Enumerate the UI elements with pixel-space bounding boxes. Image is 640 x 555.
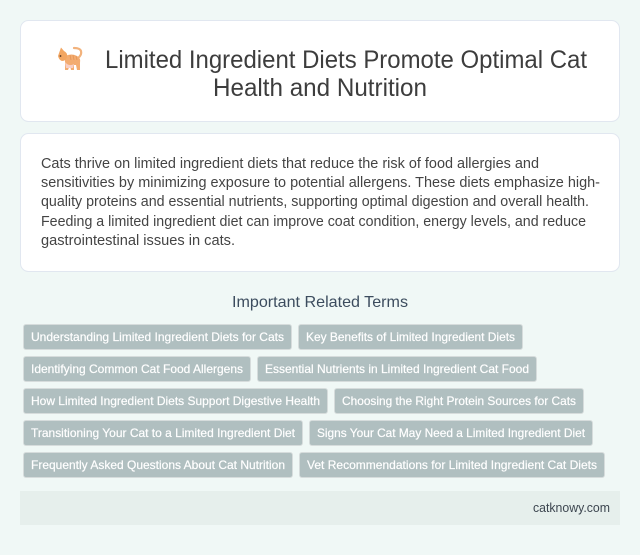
- title text: Health and Nutrition: [213, 74, 427, 102]
- panel: description: [20, 134, 620, 272]
- tag: protein sources: [334, 388, 584, 414]
- description text: sensitivities by minimizing exposure to potential allergens. These diets emphasize high-: [41, 175, 600, 191]
- tag: digestive health: How Limited Ingredient Diets Support Digestive Health: [31, 394, 320, 408]
- tag: signs: Signs Your Cat May Need a Limited Ingredient Diet: [317, 426, 586, 440]
- tag: protein sources: Choosing the Right Protein Sources for Cats: [342, 394, 576, 408]
- tag: digestive health: [24, 388, 328, 414]
- tag: essential nutrients: [258, 356, 536, 382]
- tag: understanding: Understanding Limited Ingredient Diets for Cats: [31, 330, 284, 344]
- tag: understanding: [24, 324, 292, 350]
- related term tags: [24, 324, 604, 478]
- description text: quality proteins and essential nutrients, supporting optimal digestion and overall health.: [41, 194, 589, 210]
- tag: vet recommendations: [300, 452, 604, 478]
- title text: Limited Ingredient Diets Promote Optimal Cat: [105, 46, 587, 74]
- tag: faq: [24, 452, 292, 478]
- description text: Feeding a limited ingredient diet can improve coat condition, energy levels, and reduce: [41, 214, 586, 230]
- footer: [20, 491, 620, 525]
- title panel: [20, 20, 620, 122]
- tag: transitioning: [24, 420, 302, 446]
- tag: key benefits: Key Benefits of Limited Ingredient Diets: [306, 330, 515, 344]
- tag: key benefits: [298, 324, 522, 350]
- tag: transitioning: Transitioning Your Cat to a Limited Ingredient Diet: [31, 426, 296, 440]
- heading: important related terms: Important Related Terms: [232, 294, 408, 311]
- tag: vet recommendations: Vet Recommendations for Limited Ingredient Cat Diets: [307, 458, 597, 472]
- tag: allergens: [24, 356, 250, 382]
- tag: signs: [310, 420, 592, 446]
- description text: Cats thrive on limited ingredient diets that reduce the risk of food allergies and: [41, 156, 539, 172]
- tag: allergens: Identifying Common Cat Food Allergens: [31, 362, 243, 376]
- tag: essential nutrients: Essential Nutrients in Limited Ingredient Cat Food: [265, 362, 529, 376]
- description text: gastrointestinal issues in cats.: [41, 233, 235, 249]
- footer domain: catknowy.com: [533, 500, 610, 515]
- icon: cat: [58, 48, 81, 70]
- tag: faq: Frequently Asked Questions About Cat Nutrition: [31, 458, 285, 472]
